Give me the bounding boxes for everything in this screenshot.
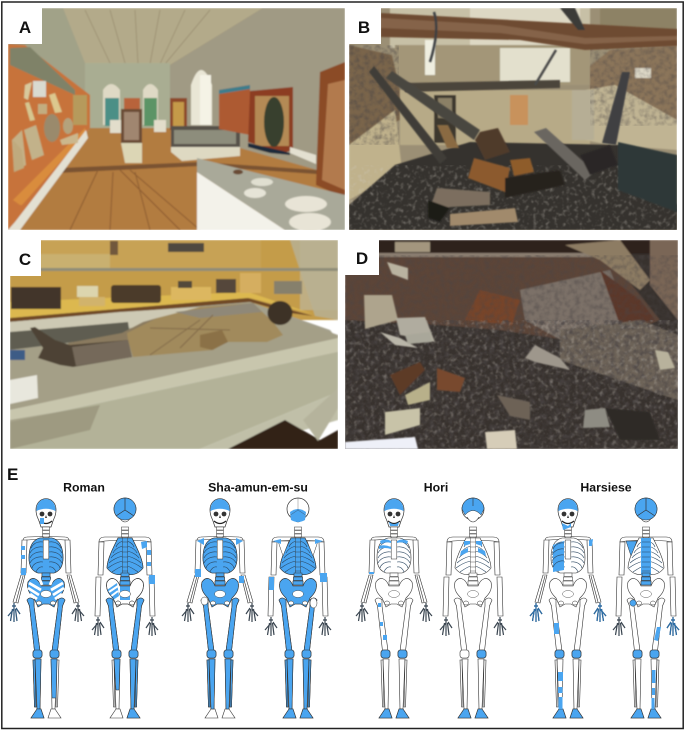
panel E: skeleton preservation diagrams (7, 465, 679, 718)
heading: Sha-amun-em-su: Sha-amun-em-su (208, 480, 308, 494)
skeleton: Hori anterior (356, 499, 432, 718)
skeleton: Sha-amun-em-su anterior (182, 499, 258, 718)
panel letter E: E (7, 465, 18, 484)
panel letter D: D (356, 249, 368, 268)
panel D: burned debris with mummy remains (345, 240, 678, 449)
panel letter D (345, 240, 379, 275)
panel B: gallery ruins after the fire (349, 8, 677, 230)
heading: Hori: Hori (424, 480, 448, 494)
panel letter B (349, 8, 381, 44)
heading: Roman: Roman (63, 480, 105, 494)
skeleton: Harsiese anterior (530, 499, 606, 718)
panel letter A: A (19, 18, 31, 37)
skeleton: Hori posterior (440, 498, 506, 718)
panel letter C (10, 240, 41, 276)
panel letter B: B (358, 18, 370, 37)
panel C: mummy in display case (10, 240, 338, 449)
skeleton: Roman posterior (92, 498, 158, 718)
skeleton: Sha-amun-em-su posterior (265, 498, 331, 718)
skeleton: Harsiese posterior (613, 498, 679, 718)
panel A: museum Egyptian gallery before the fire (8, 8, 345, 231)
panel letter C: C (19, 250, 31, 269)
panel letter A (8, 8, 42, 44)
heading: Harsiese: Harsiese (580, 480, 632, 494)
skeleton: Roman anterior (8, 499, 84, 718)
